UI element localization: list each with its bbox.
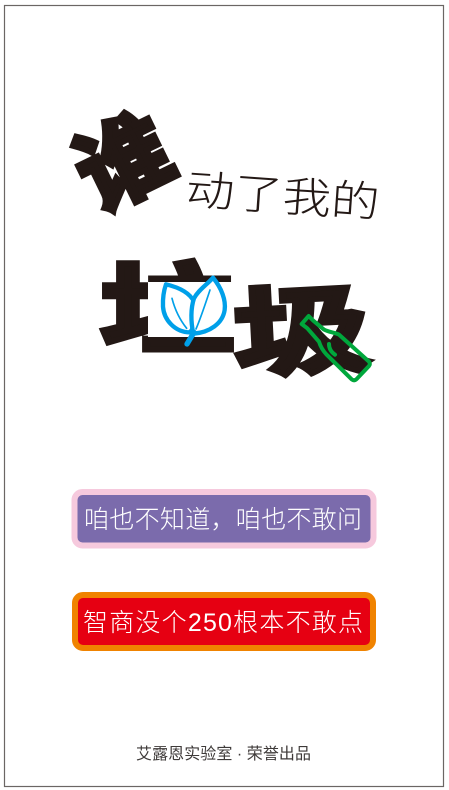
title: 谁动了我的垃圾 [61,98,381,390]
button text: 咱也不知道，咱也不敢问 [84,506,362,534]
icon: green bottle [302,316,370,380]
icon: blue leaves [163,278,225,344]
button background [75,595,373,648]
footer credit: 艾露恩实验室 · 荣誉出品 [136,745,311,763]
leaf backing [148,282,234,337]
title line: 动了我的: 动了我的 [184,166,381,227]
button: purple line [74,492,374,546]
button: red line [75,595,373,648]
title character: 垃: 垃 [100,257,234,366]
title character: 谁: 谁 [61,98,188,230]
button background [74,492,374,546]
button text: 智商没个250根本不敢点 [83,609,363,637]
title character: 圾: 圾 [230,276,373,390]
